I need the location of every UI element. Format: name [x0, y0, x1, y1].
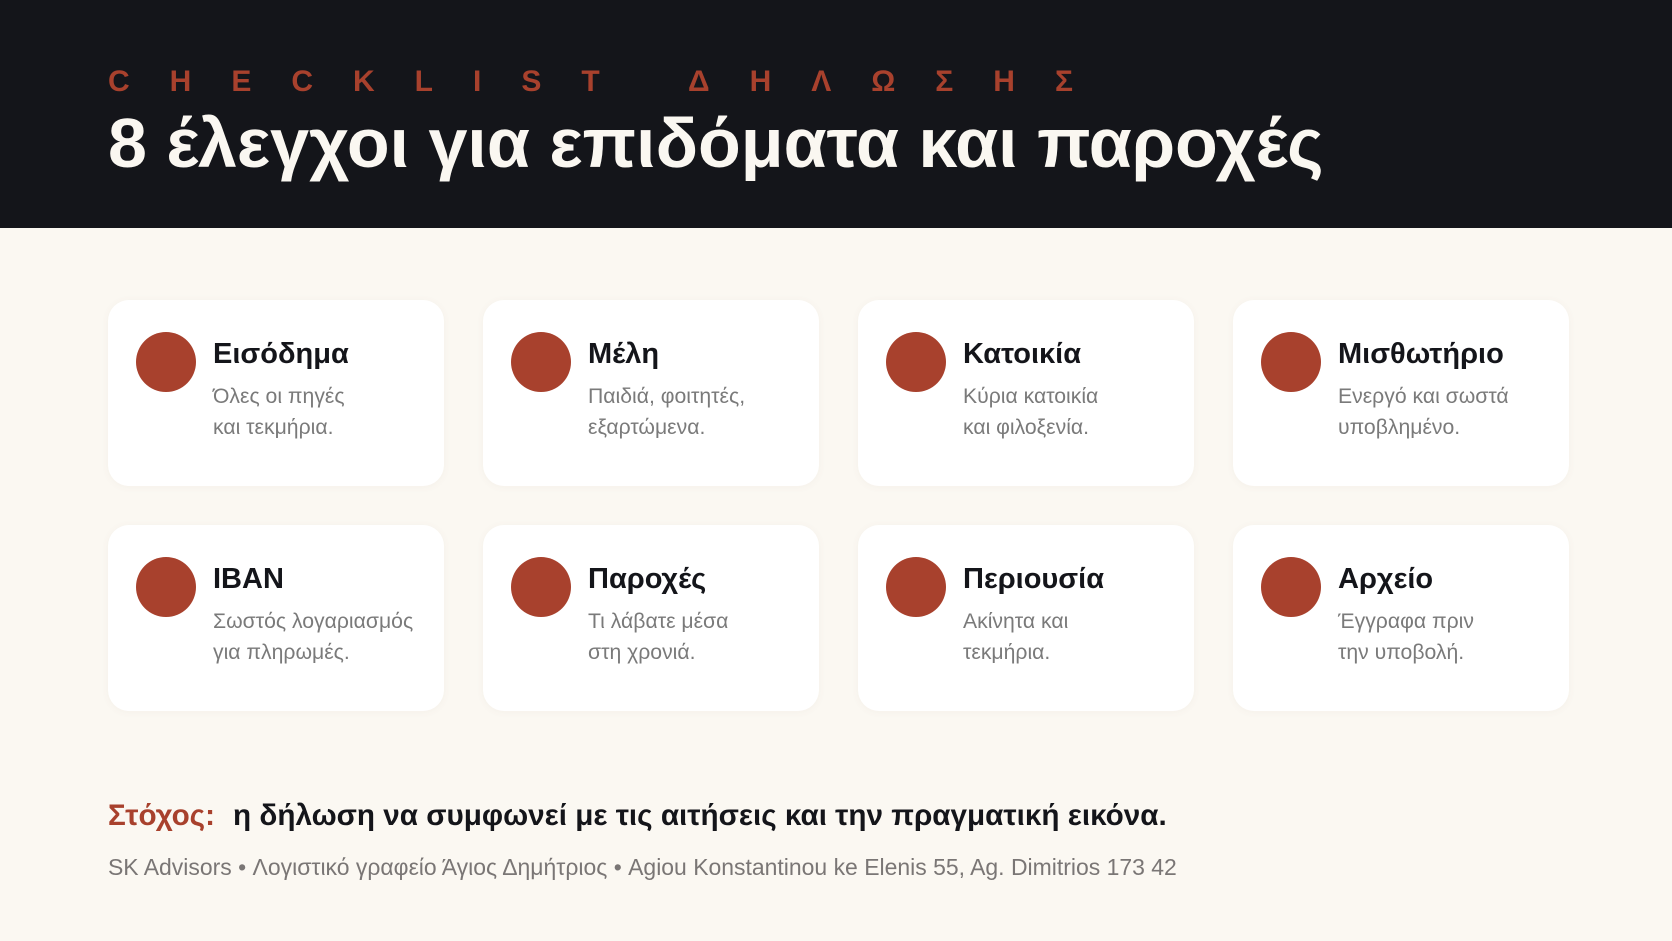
- card description: και φιλοξενία.: [963, 416, 1089, 439]
- header band: [0, 0, 1672, 228]
- card description: Ακίνητα και: [963, 610, 1068, 632]
- card: Μισθωτήριο: [1233, 300, 1569, 486]
- icon: circle marker: [886, 556, 946, 616]
- goal statement: Στόχος: η δήλωση να συμφωνεί με τις αιτήσεις και την πραγματική εικόνα.: [108, 799, 1167, 832]
- card heading: Μέλη: [588, 338, 659, 370]
- card description: Όλες οι πηγές: [213, 385, 345, 408]
- main title: 8 έλεγχοι για επιδόματα και παροχές: [108, 104, 1324, 182]
- card: Μέλη: [483, 300, 819, 486]
- footer contact line: SK Advisors • Λογιστικό γραφείο Άγιος Δημήτριος • Agiou Konstantinou ke Elenis 55, Ag. Dimitrios 173 42: [108, 854, 1177, 880]
- card heading: Περιουσία: [963, 562, 1104, 594]
- card: Παροχές: [483, 524, 819, 710]
- eyebrow label: CHECKLIST ΔΗΛΩΣΗΣ: [108, 65, 1113, 98]
- card: Κατοικία: [858, 300, 1194, 486]
- card heading: Αρχείο: [1338, 562, 1433, 594]
- icon: circle marker: [136, 332, 196, 392]
- card heading: Μισθωτήριο: [1338, 338, 1504, 370]
- card description: [963, 385, 1098, 439]
- card description: [213, 610, 413, 664]
- card: IBAN: [108, 524, 444, 710]
- card description: [1338, 610, 1474, 664]
- card heading: Εισόδημα: [213, 338, 349, 370]
- card: Εισόδημα: [108, 300, 444, 486]
- card heading: Κατοικία: [963, 338, 1081, 370]
- card description: εξαρτώμενα.: [588, 416, 705, 439]
- icon: circle marker: [1261, 556, 1321, 616]
- card description: [1338, 385, 1509, 439]
- card description: Παιδιά, φοιτητές,: [588, 385, 745, 408]
- card description: Κύρια κατοικία: [963, 385, 1098, 408]
- icon: circle marker: [511, 556, 571, 616]
- card description: και τεκμήρια.: [213, 416, 333, 439]
- card description: [963, 610, 1068, 664]
- card description: υποβλημένο.: [1338, 416, 1460, 439]
- card: Περιουσία: [858, 524, 1194, 710]
- card description: για πληρωμές.: [213, 640, 350, 664]
- card description: [212, 385, 345, 439]
- icon: circle marker: [1261, 332, 1321, 392]
- icon: circle marker: [136, 556, 196, 616]
- card: Αρχείο: [1233, 524, 1569, 710]
- icon: circle marker: [511, 332, 571, 392]
- card description: Σωστός λογαριασμός: [213, 610, 413, 632]
- card description: Ενεργό και σωστά: [1338, 385, 1509, 408]
- card heading: IBAN: [213, 562, 284, 594]
- icon: circle marker: [886, 332, 946, 392]
- card description: στη χρονιά.: [588, 640, 696, 664]
- card description: τεκμήρια.: [963, 640, 1050, 664]
- card description: Τι λάβατε μέσα: [588, 610, 728, 632]
- card heading: Παροχές: [588, 562, 706, 594]
- card description: [588, 385, 745, 439]
- card description: [588, 610, 728, 664]
- card description: την υποβολή.: [1338, 640, 1464, 664]
- card description: Έγγραφα πριν: [1338, 610, 1474, 632]
